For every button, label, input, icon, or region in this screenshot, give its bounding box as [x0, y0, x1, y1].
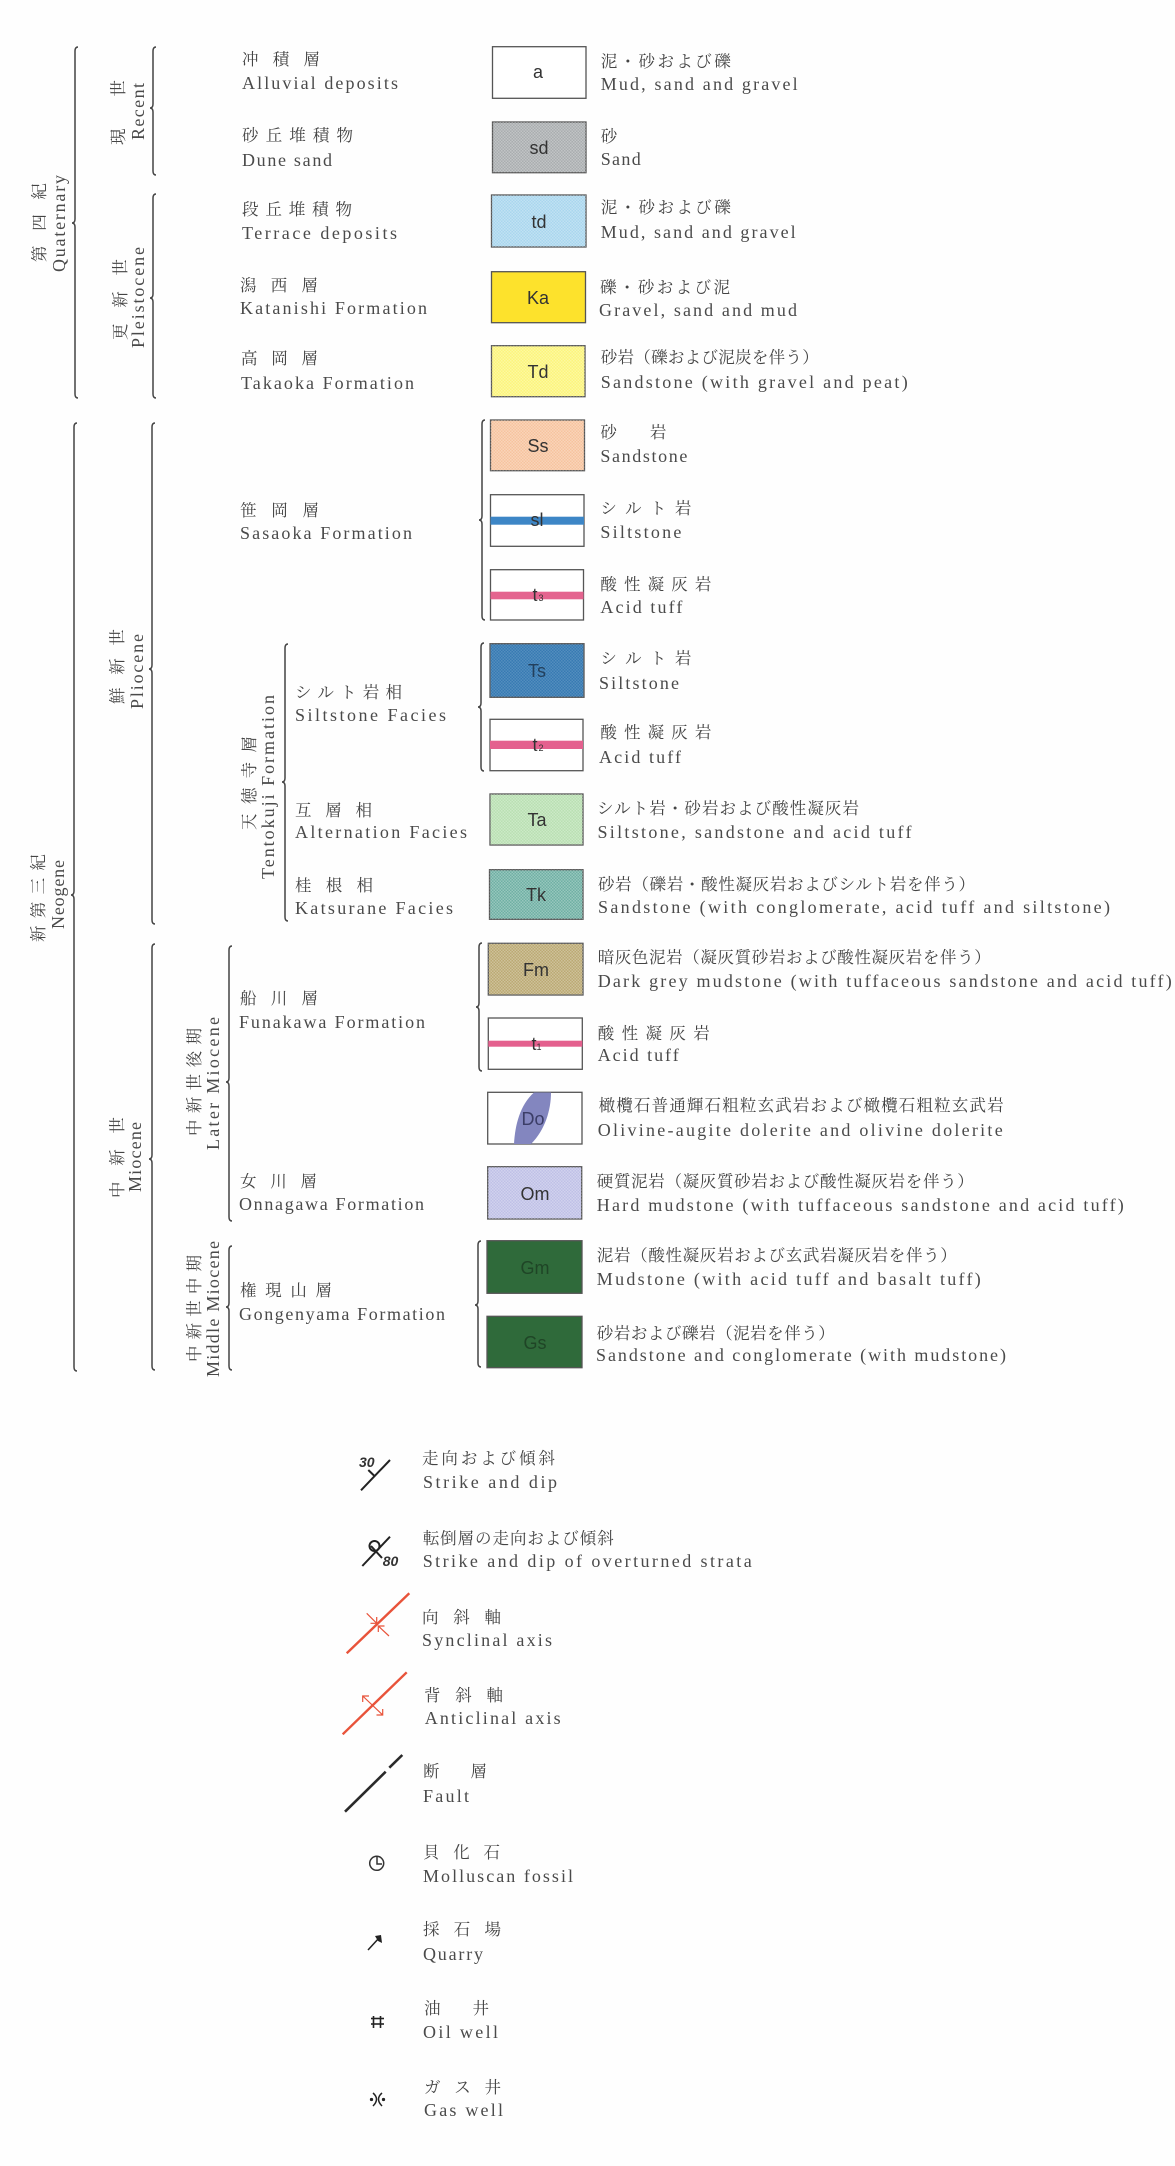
text: 転倒層の走向および傾斜 [423, 1529, 614, 1548]
formation name: Siltstone Facies [295, 705, 446, 725]
formation name [240, 276, 427, 318]
panel: age hierarchy [29, 47, 485, 1377]
swatch: sl [490, 495, 584, 546]
text [423, 1999, 498, 2042]
description: t1: 酸性凝灰岩 [598, 1024, 710, 1043]
description: シルト岩・砂岩および酸性凝灰岩 [597, 799, 859, 818]
description: Sand [601, 149, 641, 169]
swatch: td [492, 195, 586, 247]
description: t2: Acid tuff [599, 747, 681, 767]
swatch: t1 [488, 1018, 582, 1069]
swatch: sd: sd [529, 138, 549, 158]
description: Ss [600, 423, 687, 466]
label: Middle Miocene: Middle Miocene [203, 1241, 223, 1377]
brace: Pleistocene [150, 194, 156, 398]
swatch: t1: 1 [536, 1042, 542, 1052]
label: Quaternary: 第四紀 [30, 183, 49, 262]
label: Recent: 現世 [109, 80, 128, 145]
description: 礫・砂および泥 [600, 278, 730, 297]
swatch: Gm [487, 1241, 582, 1293]
text: Anticlinal axis [425, 1708, 561, 1728]
description: 橄欖石普通輝石粗粒玄武岩および橄欖石粗粒玄武岩 [599, 1096, 1004, 1115]
text: 向斜軸 [422, 1608, 501, 1627]
formation name: Dune sand [242, 150, 332, 170]
label: Middle Miocene: 中新世中期 [185, 1255, 204, 1362]
text [422, 1608, 552, 1650]
label: Miocene [108, 1117, 145, 1198]
description: 泥・砂および礫 [601, 52, 731, 71]
swatch: t2 [490, 719, 583, 771]
label: Pleistocene [111, 247, 148, 348]
formation name [242, 126, 353, 170]
formation name: 船川層 [240, 989, 318, 1008]
swatch: Td [492, 346, 585, 397]
description: Fm: 暗灰色泥岩（凝灰質砂岩および酸性凝灰岩を伴う） [598, 948, 991, 967]
brace: Quaternary [72, 47, 78, 398]
row: Dune sand [242, 122, 641, 173]
brace: Pliocene [149, 423, 155, 924]
label: Pliocene [108, 629, 147, 709]
formation name [295, 683, 446, 725]
text: Oil well [423, 2022, 498, 2042]
swatch: Ts [490, 644, 584, 697]
swatch: Fm: Fm [523, 960, 549, 980]
swatch: Ss [490, 420, 584, 471]
row: Dolerite [488, 1092, 1004, 1144]
text: 採石場 [423, 1920, 501, 1939]
swatch: Td: Td [527, 362, 549, 382]
symbol row: Synclinal axis [347, 1593, 552, 1653]
text [422, 1449, 557, 1492]
text: 断層 [423, 1762, 487, 1781]
description: Ts: シルト岩 [600, 649, 691, 668]
formation name: 女川層 [240, 1172, 317, 1191]
label: Middle Miocene [185, 1241, 223, 1377]
swatch: sd [492, 122, 586, 173]
swatch: t1: t [531, 1034, 537, 1054]
swatch: Do [488, 1092, 582, 1144]
description: Hard mudstone (with tuffaceous sandstone and acid tuff) [597, 1195, 1124, 1216]
swatch: Ka [492, 272, 586, 323]
text: 貝化石 [423, 1843, 500, 1862]
formation name [241, 349, 414, 393]
label: Pliocene: Pliocene [127, 634, 147, 709]
description: Gm [597, 1246, 981, 1290]
symbol row: Strike and dip of overturned strata [362, 1529, 752, 1571]
description: 硬質泥岩（凝灰質砂岩および酸性凝灰岩を伴う） [597, 1172, 974, 1191]
formation name [240, 501, 412, 543]
description: t3: Acid tuff [600, 597, 682, 617]
label: Neogene [29, 854, 68, 942]
description [598, 1096, 1004, 1140]
label: Later Miocene: Later Miocene [203, 1017, 223, 1150]
description: 泥・砂および礫 [601, 198, 731, 217]
label: Quaternary [30, 175, 69, 272]
brace: Funakawa rocks [476, 943, 482, 1071]
swatch: Om: Om [520, 1184, 550, 1204]
swatch: Gs [487, 1316, 582, 1368]
text: Quarry [423, 1944, 483, 1964]
text [423, 1920, 501, 1964]
swatch: Tk: Tk [526, 885, 547, 905]
description: t3: 酸性凝灰岩 [600, 575, 711, 594]
label: Neogene: Neogene [48, 860, 68, 929]
brace: Recent [150, 47, 156, 175]
row: Onnagawa Formation [239, 1167, 1124, 1219]
description [601, 198, 796, 242]
description: sl: シルト岩 [600, 499, 691, 518]
label: Pliocene: 鮮新世 [108, 629, 127, 704]
brace: Neogene [71, 423, 77, 1371]
formation name: Alluvial deposits [242, 73, 398, 93]
row: Takaoka Formation [241, 346, 908, 397]
text: Fault [423, 1786, 469, 1806]
row: Alternation Facies [295, 794, 912, 845]
row: Katanishi Formation [240, 272, 797, 323]
swatch: Ts: Ts [528, 661, 546, 681]
text [423, 1529, 752, 1571]
swatch: sl: sl [530, 510, 544, 530]
description: 砂岩（礫および泥炭を伴う） [601, 348, 819, 367]
panel: map symbols [343, 1449, 752, 2120]
text: Strike and dip [423, 1472, 557, 1492]
symbol row: Quarry [368, 1920, 501, 1964]
swatch: t3: 3 [538, 593, 544, 603]
row: Sasaoka Formation [240, 420, 711, 620]
label: Later Miocene: 中新世後期 [185, 1028, 204, 1136]
formation name: 冲積層 [242, 50, 320, 69]
swatch: a: a [533, 62, 544, 82]
text: 走向および傾斜 [422, 1449, 556, 1468]
label: Pleistocene: Pleistocene [128, 247, 148, 348]
symbol row: Molluscan fossil [370, 1843, 573, 1886]
brace: Gongenyama rocks [475, 1241, 481, 1367]
row: Siltstone Facies [295, 644, 711, 771]
icon: fault [345, 1755, 402, 1812]
symbol row: Strike and dip [359, 1449, 557, 1492]
formation name: Sasaoka Formation [240, 523, 412, 543]
description [598, 875, 1110, 918]
icon: synclinal axis [347, 1593, 409, 1653]
formation name: 段丘堆積物 [242, 200, 352, 219]
description: t2: 酸性凝灰岩 [600, 723, 711, 742]
text: 油井 [424, 1999, 489, 2018]
description: 砂 [601, 127, 618, 146]
icon: overturned strata [362, 1537, 398, 1569]
text: ガス井 [424, 2078, 501, 2097]
swatch: Ka: Ka [527, 288, 550, 308]
label: Neogene: 新第三紀 [29, 854, 48, 942]
brace: Tentokuji Formation [282, 644, 288, 921]
formation name [295, 801, 467, 842]
description [601, 127, 641, 169]
formation name: Onnagawa Formation [239, 1194, 424, 1214]
description [599, 278, 797, 320]
description: Gravel, sand and mud [599, 300, 797, 320]
text: Synclinal axis [422, 1630, 552, 1650]
swatch: Fm [488, 943, 583, 995]
description: Gm: 泥岩（酸性凝灰岩および玄武岩凝灰岩を伴う） [597, 1246, 957, 1265]
swatch: Om [488, 1167, 582, 1219]
formation name: 高岡層 [241, 349, 318, 368]
icon: oil well [371, 2016, 384, 2028]
formation name [239, 989, 425, 1032]
description [597, 1172, 1124, 1216]
description: Gs [596, 1324, 1006, 1366]
description: Gs: Sandstone and conglomerate (with mudstone) [596, 1345, 1006, 1366]
label: Recent [109, 80, 148, 145]
formation name: Katsurane Facies [295, 898, 453, 918]
icon: anticlinal axis [343, 1672, 407, 1734]
description: t1: Acid tuff [598, 1045, 679, 1065]
description: Sandstone (with gravel and peat) [601, 372, 908, 393]
description [601, 52, 798, 94]
description: Ss: Sandstone [600, 446, 687, 466]
label: Miocene: 中新世 [108, 1117, 127, 1198]
formation name: 笹岡層 [240, 501, 319, 520]
swatch: Gs: Gs [523, 1333, 547, 1353]
row: Katsurane Facies [295, 870, 1110, 919]
formation name: Funakawa Formation [239, 1012, 425, 1032]
description: Fm [598, 948, 1172, 992]
icon: quarry [368, 1935, 382, 1950]
formation name: 権現山層 [240, 1281, 332, 1300]
swatch: Do: Do [521, 1109, 545, 1129]
text [423, 1762, 487, 1806]
formation name: 桂根相 [295, 876, 373, 895]
description: Mud, sand and gravel [601, 222, 796, 242]
text: 背斜軸 [424, 1686, 503, 1705]
description: Olivine-augite dolerite and olivine dolerite [598, 1120, 1003, 1140]
icon: strike and dip: 30 [359, 1454, 375, 1470]
swatch: Ta: Ta [527, 810, 547, 830]
text [424, 2078, 503, 2120]
formation name: シルト岩相 [295, 683, 402, 702]
formation name: Katanishi Formation [240, 298, 427, 318]
brace: Middle Miocene [226, 1246, 232, 1370]
formation name: 潟西層 [240, 276, 318, 295]
label: Recent: Recent [128, 83, 148, 140]
brace: Siltstone facies rocks [478, 643, 484, 771]
row: Alluvial deposits [242, 47, 798, 98]
symbol row: Anticlinal axis [343, 1672, 561, 1734]
formation name: Takaoka Formation [241, 373, 414, 393]
label: Tentokuji Formation: 天徳寺層 [240, 736, 259, 830]
description [601, 348, 908, 393]
icon: gas well [371, 2093, 384, 2106]
description: Gs: 砂岩および礫岩（泥岩を伴う） [597, 1324, 835, 1343]
description: t3 [600, 575, 711, 617]
formation name: 砂丘堆積物 [242, 126, 353, 145]
description: Mud, sand and gravel [601, 74, 798, 94]
row: Funakawa Formation [239, 943, 1172, 1069]
text: Strike and dip of overturned strata [423, 1551, 752, 1571]
description: Ts: Siltstone [599, 673, 679, 693]
swatch: Ss: Ss [527, 436, 549, 456]
brace: Later Miocene [226, 946, 232, 1221]
text: Molluscan fossil [423, 1866, 573, 1886]
swatch: t3 [490, 570, 584, 620]
symbol row: Gas well [371, 2078, 503, 2120]
swatch: t3: t [532, 585, 538, 605]
label: Quaternary: Quaternary [49, 175, 69, 272]
description: Ss: 砂岩 [600, 423, 666, 442]
description: Gm: Mudstone (with acid tuff and basalt tuff) [597, 1269, 981, 1290]
description: sl: Siltstone [600, 522, 681, 542]
swatch: a [492, 47, 586, 98]
icon: fossil [370, 1856, 384, 1870]
text [423, 1843, 573, 1886]
description: sl [600, 499, 691, 542]
description: t2 [599, 723, 711, 767]
formation name [242, 200, 397, 243]
text [424, 1686, 561, 1728]
swatch: td: td [531, 212, 547, 232]
description: t1 [598, 1024, 710, 1065]
label: Tentokuji Formation: Tentokuji Formation [258, 695, 278, 879]
text: Gas well [424, 2100, 503, 2120]
swatch: Tk [490, 870, 583, 919]
brace: Sasaoka rocks [479, 420, 485, 620]
swatch: Gm: Gm [520, 1258, 550, 1278]
formation name [295, 876, 453, 918]
row: Gongenyama Formation [239, 1241, 1006, 1368]
label: Miocene: Miocene [125, 1122, 145, 1192]
swatch: t2: t [532, 735, 538, 755]
swatch: Ta [490, 794, 583, 845]
row: Terrace deposits [242, 195, 796, 247]
swatch: t2: 2 [538, 743, 544, 753]
formation name: Alternation Facies [295, 822, 467, 842]
brace: Miocene [149, 944, 155, 1370]
formation name [242, 50, 398, 93]
formation name: 互層相 [295, 801, 372, 820]
formation name: Terrace deposits [242, 223, 397, 243]
symbol row: Oil well [371, 1999, 498, 2042]
symbol row: Fault [345, 1755, 487, 1812]
description: Sandstone (with conglomerate, acid tuff and siltstone) [598, 897, 1110, 918]
formation name [239, 1281, 445, 1324]
description: 砂岩（礫岩・酸性凝灰岩およびシルト岩を伴う） [598, 875, 975, 894]
description: Fm: Dark grey mudstone (with tuffaceous sandstone and acid tuff) [598, 971, 1172, 992]
description: Ts [599, 649, 691, 693]
description: Siltstone, sandstone and acid tuff [598, 822, 912, 842]
label: Pleistocene: 更新世 [111, 259, 130, 340]
icon: strike and dip [359, 1454, 390, 1490]
label: Tentokuji Formation [240, 695, 278, 879]
description [597, 799, 912, 842]
icon: overturned strata: 80 [383, 1553, 398, 1569]
formation name [239, 1172, 424, 1214]
formation name: Gongenyama Formation [239, 1304, 445, 1324]
label: Later Miocene [185, 1017, 223, 1150]
